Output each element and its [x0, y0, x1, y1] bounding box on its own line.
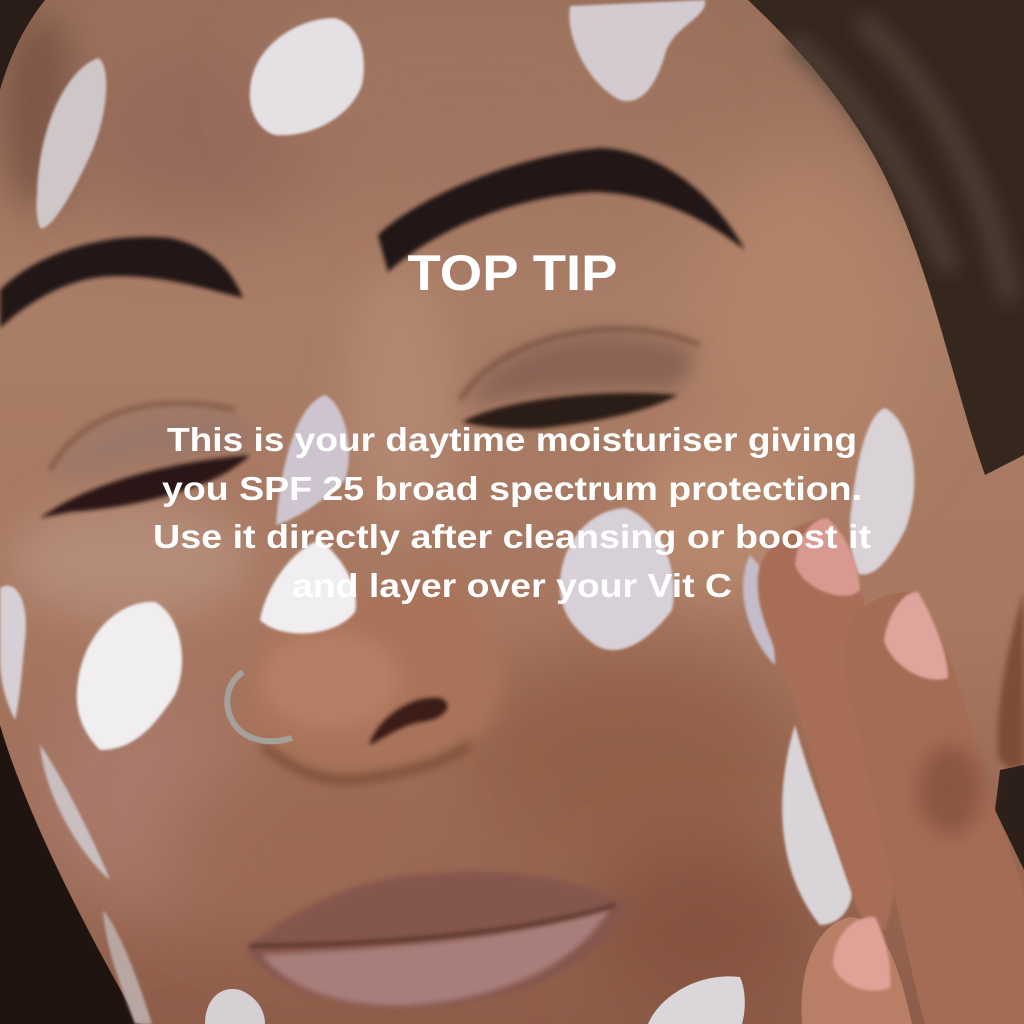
body text	[153, 421, 871, 604]
fingers	[758, 518, 1024, 1024]
right eyelid	[460, 329, 700, 429]
knuckle shading	[918, 745, 982, 835]
fingernail: index	[795, 518, 860, 596]
fingernail: lower	[833, 917, 890, 991]
body text: and layer over your Vit C	[292, 567, 732, 604]
ear / right face edge	[995, 590, 1024, 870]
dot: left cheek large	[77, 602, 182, 750]
dot: right cheek upper	[850, 408, 914, 574]
body text: This is your daytime moisturiser giving	[167, 421, 857, 458]
dot: lower streak	[103, 910, 152, 1024]
hair top right	[748, 0, 1024, 475]
hair highlights	[790, 20, 1010, 300]
dot: forehead top	[569, 0, 705, 101]
dot: jaw streak	[40, 745, 110, 880]
lower finger	[801, 917, 912, 1024]
title: TOP TIP	[408, 245, 618, 301]
nose	[242, 560, 503, 780]
middle finger	[844, 592, 1024, 1024]
body text: Use it directly after cleansing or boost it	[153, 518, 871, 555]
right eyebrow	[378, 148, 745, 272]
dot: far left	[0, 586, 26, 720]
dot: jaw right	[782, 725, 853, 925]
left eyebrow	[0, 237, 243, 328]
hair top left	[0, 0, 45, 90]
nose ring	[227, 672, 292, 741]
index finger	[758, 518, 895, 930]
dot: chin right	[648, 976, 745, 1024]
lips	[245, 872, 628, 1008]
dot: forehead centre	[250, 18, 364, 135]
body text: you SPF 25 broad spectrum protection.	[162, 470, 862, 507]
hair bottom left	[0, 725, 140, 1024]
dot: forehead left	[36, 58, 106, 228]
dot: nose	[260, 540, 356, 633]
dot: nose bridge	[276, 395, 349, 525]
fingernail: middle	[884, 592, 948, 680]
dot: near finger	[743, 555, 775, 665]
dot: chin left	[205, 989, 265, 1024]
left eyelid	[40, 403, 252, 518]
dot: cheek	[560, 508, 674, 650]
